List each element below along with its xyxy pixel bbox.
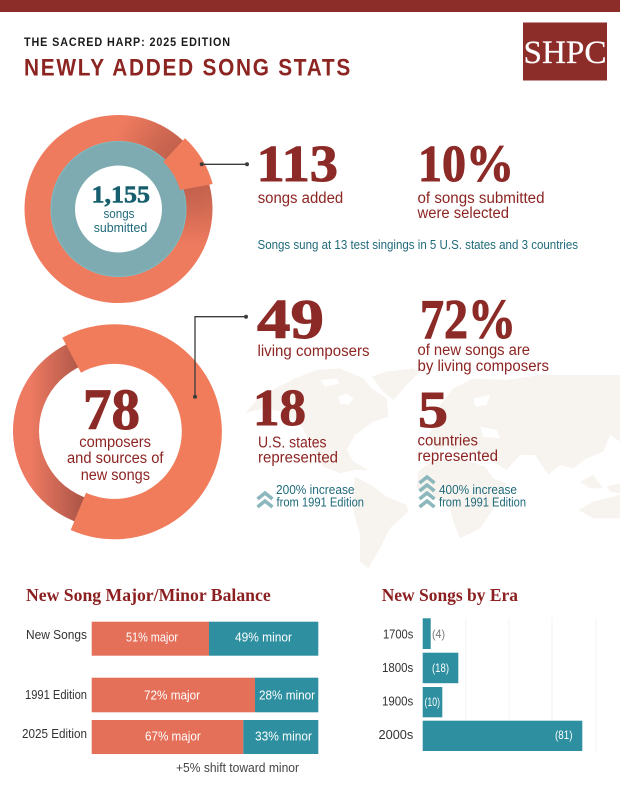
row: 1900s: (10) (424, 695, 440, 709)
row: 1800s: 1800s (382, 660, 414, 675)
stat: 5 countries (418, 382, 498, 465)
stat: 18 U.S. states (253, 380, 338, 467)
stat: 113 songs added (256, 136, 343, 207)
base ring (13, 334, 207, 528)
heading: major minor balance: New Song Major/Minor Balance (26, 585, 271, 605)
stat: 18 U.S. states: U.S. states (258, 435, 327, 452)
stat: 5 countries: represented (418, 448, 498, 465)
stat: 49 living composers: 49 (257, 289, 324, 351)
row: 1991 edition: 72% major (144, 688, 200, 702)
stat: 49 living composers (257, 289, 370, 360)
donut centre label: submitted (94, 220, 147, 235)
stat: 113 songs added: 113 (256, 136, 338, 193)
callout: 400 percent increase: 400% increase (439, 483, 517, 497)
row: 1991 edition (25, 678, 318, 712)
heading: new songs by era: New Songs by Era (382, 585, 518, 605)
note: test singings: Songs sung at 13 test singings in 5 U.S. states and 3 countries (258, 238, 578, 252)
chart: new songs by era (378, 618, 596, 753)
row: 1700s (383, 618, 445, 649)
row: new songs: 49% minor (235, 631, 292, 645)
stat: 72 percent by living composers: of new songs are (418, 342, 530, 359)
white centre (39, 360, 181, 502)
white centre (75, 166, 162, 252)
row: 2000s (378, 721, 582, 751)
stat: 10 percent selected: of songs submitted (418, 190, 544, 207)
chart: major minor stacked bars (22, 622, 318, 754)
main title: NEWLY ADDED SONG STATS (24, 54, 352, 82)
row: 1800s (382, 653, 458, 683)
callout: 400 percent increase: from 1991 Edition (439, 496, 526, 510)
centre number: 78 (83, 377, 140, 442)
row: new songs: 51% major (126, 631, 178, 645)
row: new songs (26, 622, 318, 656)
centre label: and sources of (67, 450, 164, 467)
callout: 200 percent increase: 200% increase (276, 483, 355, 497)
stat: 72 percent by living composers: 72% (420, 289, 516, 351)
icon: quadruple chevron up (420, 477, 434, 507)
donut: composers and sources (13, 324, 222, 539)
row: 2000s: 2000s (378, 727, 414, 742)
stat: 18 U.S. states: represented (258, 450, 338, 467)
stat: 72 percent by living composers: by living composers (418, 358, 549, 375)
highlighted wedge (62, 324, 222, 539)
row: 2025 edition: 67% major (145, 729, 201, 743)
stat: 10 percent selected: 10% (418, 136, 514, 193)
stat: 72 percent by living composers (418, 289, 549, 375)
row: 1800s: (18) (432, 661, 449, 675)
outer ring (24, 115, 212, 303)
teal inner ring (51, 142, 186, 276)
logo: SHPC (523, 22, 607, 80)
icon: double chevron up (258, 493, 272, 507)
donut centre label: songs (104, 206, 135, 221)
row: 1900s: 1900s (382, 694, 414, 709)
eyebrow title: THE SACRED HARP: 2025 EDITION (24, 35, 231, 49)
stat: 5 countries: countries (418, 433, 478, 450)
callout: 200 percent increase: from 1991 Edition (276, 496, 364, 510)
stat: 10 percent selected: were selected (417, 205, 509, 222)
row: 1700s: 1700s (383, 626, 414, 641)
donut: songs submitted (24, 115, 213, 303)
row: 1991 edition: 1991 Edition (25, 687, 87, 702)
donut centre number: 1,155 (92, 183, 150, 209)
top band (0, 0, 620, 12)
stat: 113 songs added: songs added (258, 190, 343, 207)
note: shift toward minor: +5% shift toward minor (176, 761, 299, 775)
row: 2025 edition (22, 720, 318, 754)
header titles (24, 35, 352, 82)
stat: 18 U.S. states: 18 (253, 380, 306, 437)
row: 2025 edition: 33% minor (255, 729, 312, 743)
centre label: new songs (81, 467, 150, 484)
row: new songs: New Songs (26, 627, 87, 642)
world map background (245, 368, 620, 568)
connector: wedge to 113 (200, 162, 249, 166)
centre label: composers (79, 434, 151, 451)
stat: 10 percent selected (417, 136, 544, 222)
connector: wedge to 49 (193, 315, 248, 399)
row: 2025 edition: 2025 Edition (22, 726, 87, 741)
row: 1700s: (4) (432, 627, 445, 641)
logo: SHPC: SHPC (524, 35, 606, 71)
row: 1900s (382, 687, 442, 717)
row: 2000s: (81) (555, 728, 572, 742)
highlighted 10 percent wedge (163, 138, 213, 190)
row: 1991 edition: 28% minor (259, 688, 315, 702)
stat: 5 countries: 5 (418, 382, 448, 439)
stat: 49 living composers: living composers (258, 343, 370, 360)
